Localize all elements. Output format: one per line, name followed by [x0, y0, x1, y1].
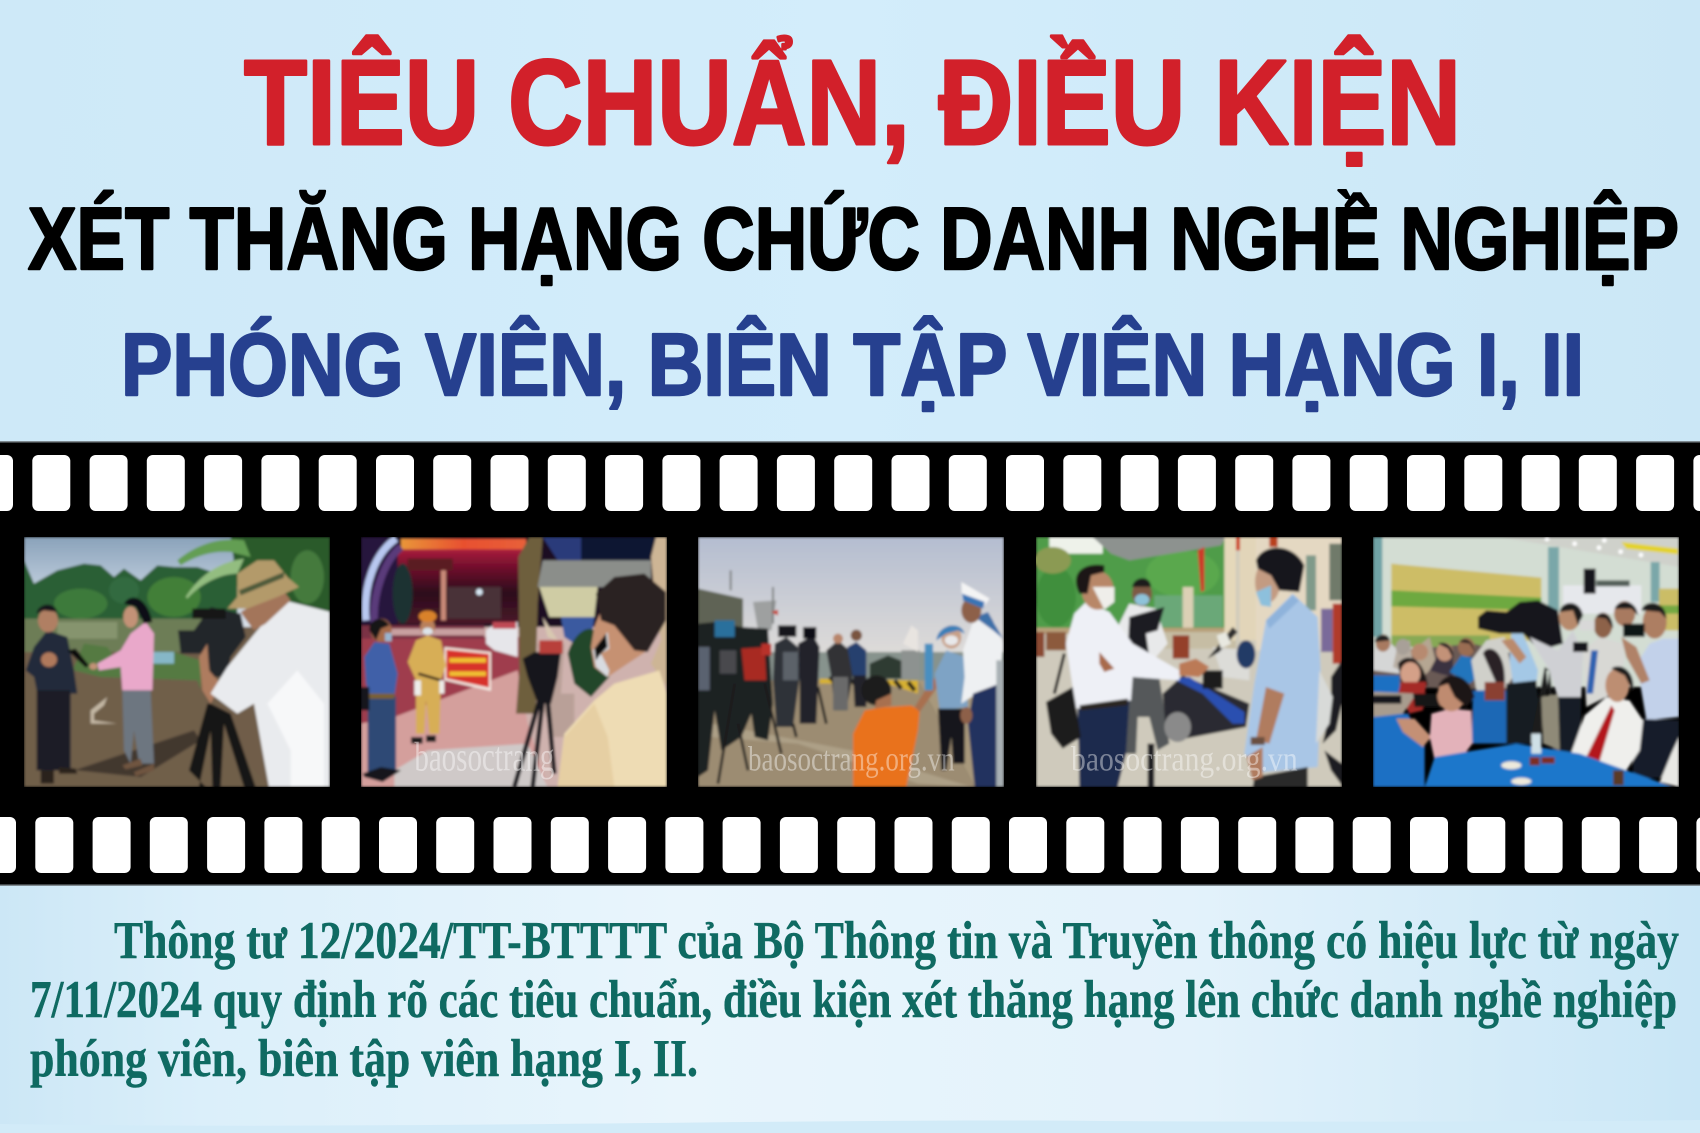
photo 1: TV crew interviewing on a riverbank — [24, 537, 330, 787]
paragraph line 3: phóng viên, biên tập viên hạng I, II. — [30, 1030, 698, 1088]
background: top area — [0, 0, 1700, 445]
photo 5: photographers at a conference hall — [1373, 537, 1679, 787]
photo 2: night interview with traffic police — [361, 537, 667, 787]
body paragraph — [30, 912, 1679, 1088]
photo 3: press corps interviewing a navy sailor — [698, 537, 1004, 787]
photo 4: reporter interviewing an official beside a motorbike — [1036, 537, 1342, 787]
watermark: baosoctrang — [414, 734, 554, 780]
film strip — [0, 441, 1700, 886]
watermark: baosoctrang.org.vn — [1071, 739, 1298, 778]
title line 1: TIÊU CHUẨN, ĐIỀU KIỆN — [244, 34, 1461, 170]
background: bottom area — [0, 885, 1700, 1133]
film perforations: top row — [0, 455, 1700, 511]
film perforations: bottom row — [0, 817, 1700, 873]
